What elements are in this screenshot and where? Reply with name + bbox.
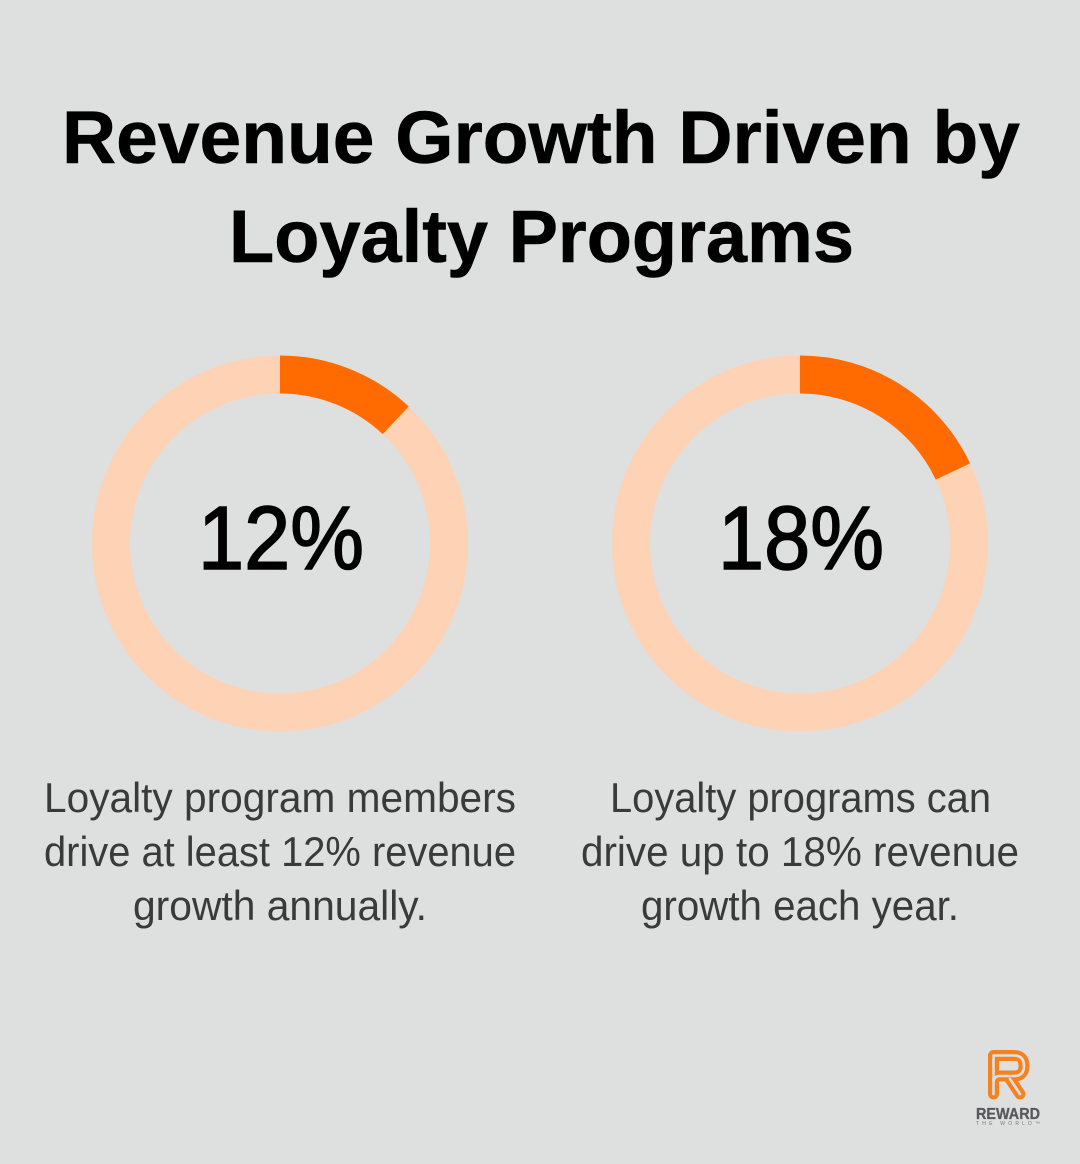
- description: 18%: growth each year.: [641, 882, 959, 929]
- description: 12%: [44, 774, 516, 929]
- logo wordmark: REWARD: [976, 1106, 1040, 1123]
- description: 18%: Loyalty programs can: [610, 774, 991, 821]
- logo tagline: THE WORLD™: [976, 1121, 1040, 1127]
- description: 18%: drive up to 18% revenue: [581, 828, 1019, 875]
- donut chart: 12%: [111, 374, 449, 712]
- title: [62, 96, 1020, 278]
- panel: 12% stat: [44, 374, 516, 929]
- donut chart: 18%: [631, 374, 969, 712]
- description: 12%: drive at least 12% revenue: [44, 828, 516, 875]
- panel: 18% stat: [581, 374, 1019, 929]
- title: Revenue Growth Driven by: [62, 96, 1020, 179]
- value: 12%: 12%: [198, 489, 364, 589]
- value: 18%: 18%: [718, 489, 884, 589]
- description: 18%: [581, 774, 1019, 929]
- icon: R mark: [994, 1056, 1024, 1094]
- description: 12%: growth annually.: [133, 882, 427, 929]
- logo: Reward the World: [976, 1056, 1040, 1127]
- title: Loyalty Programs: [229, 195, 854, 278]
- description: 12%: Loyalty program members: [44, 774, 516, 821]
